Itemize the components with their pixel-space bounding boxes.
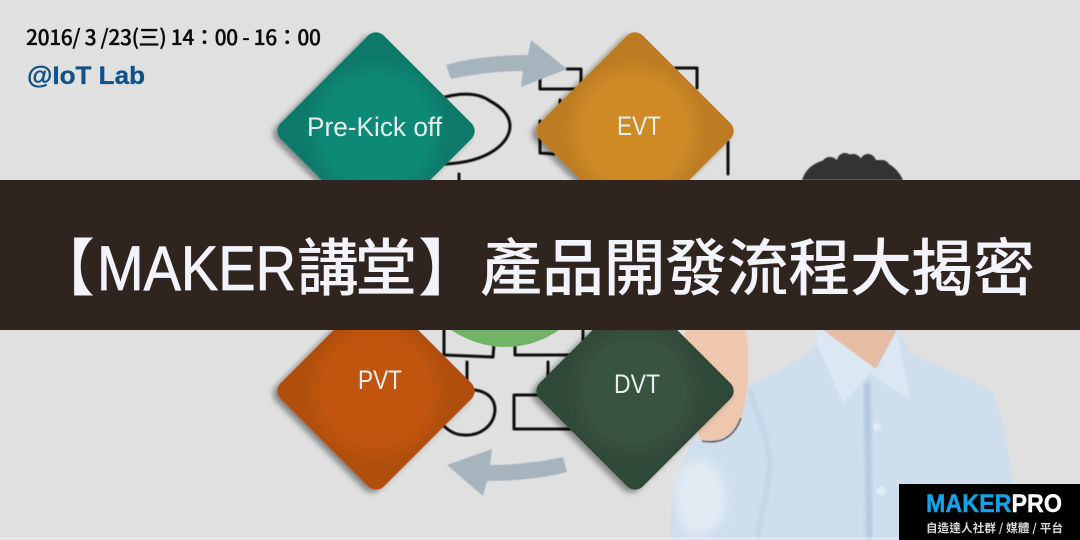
title: 產: [480, 218, 542, 308]
diamond: EVT: EVT: [617, 111, 661, 141]
green circle in flowchart: [451, 330, 559, 347]
arrow: forward to EVT: [446, 40, 567, 87]
neck: [823, 330, 897, 372]
title: 品開發流程大揭密: [542, 218, 1035, 308]
diamond: PVT: [273, 288, 479, 494]
hair: [802, 153, 903, 180]
shirt collar: [817, 330, 910, 403]
diamond: PVT: PVT: [358, 365, 402, 395]
diamond: EVT: [532, 28, 738, 234]
flowchart sketch lines: [444, 68, 728, 435]
venue: @IoT Lab: [27, 62, 145, 90]
date and time: 2016/ 3 /23(三) 14：00 - 16：00: [26, 22, 321, 52]
MAKERPRO logo: [899, 484, 1080, 540]
MAKERPRO logo: MAKERPRO: [926, 490, 1062, 518]
cuff shadow: [702, 418, 741, 442]
diamond: Pre-Kick off: [273, 28, 479, 234]
sleeve crease: [748, 388, 770, 538]
hand: [685, 330, 748, 441]
bottom edge strip: [0, 537, 1080, 540]
title: MAKER: [97, 234, 296, 304]
diamond: Pre-Kick off: Pre-Kick off: [307, 112, 442, 142]
diamond: DVT: DVT: [614, 369, 660, 399]
title: 【: [33, 218, 95, 308]
shirt: [670, 330, 1016, 540]
title: [33, 218, 1035, 308]
arrow: back from DVT to PVT: [447, 449, 567, 496]
title: 】: [418, 218, 480, 308]
title band: [0, 180, 1080, 330]
person photo illustration: [670, 153, 1016, 540]
shirt buttons: [873, 423, 886, 496]
shirt placket: [864, 378, 872, 540]
diamond: DVT: [532, 288, 738, 494]
MAKERPRO logo: 自造達人社群 / 媒體 / 平台: [926, 520, 1063, 536]
title: 講堂: [297, 218, 417, 308]
sleeve highlights: [676, 460, 726, 535]
